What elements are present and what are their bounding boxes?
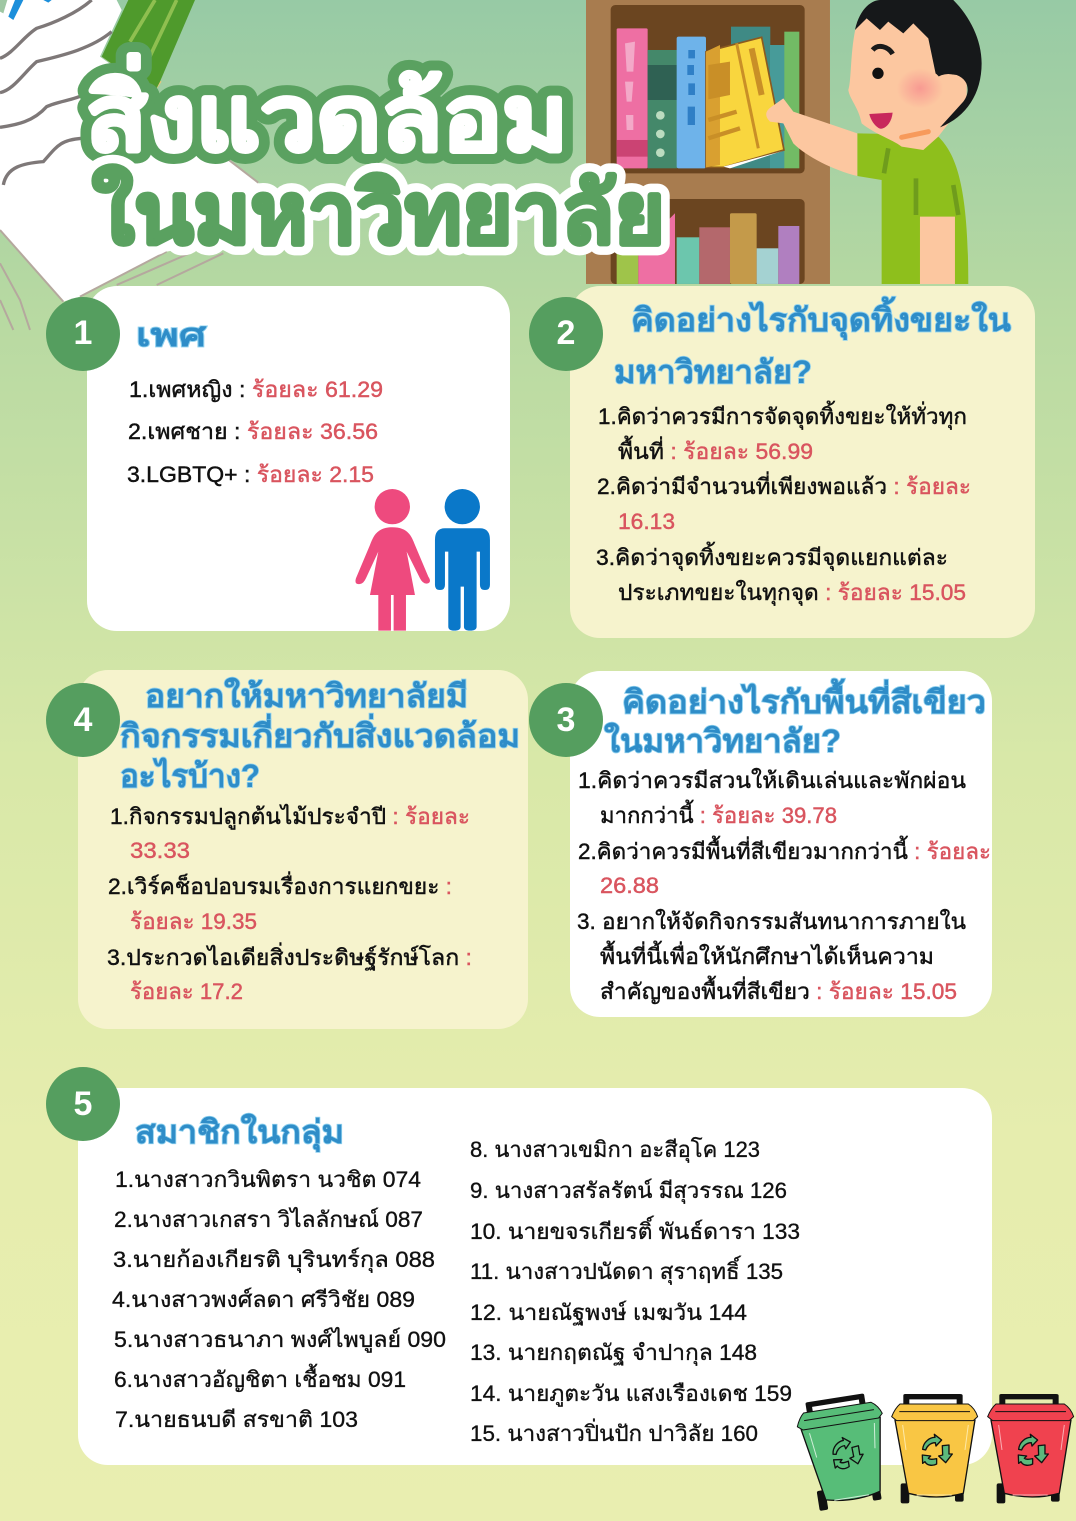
title: ในมหาวิทยาลัย [92,165,665,262]
list: members column 2: 15. นางสาวปิ่นปัก ปาวิลัย 160 [470,1418,758,1446]
heading: green space [604,678,986,759]
heading: activities [120,677,520,794]
badge 4: 4 [74,701,93,739]
list: members column 2: 10. นายขจรเกียรติ์ พันธ์ดารา 133 [470,1216,800,1244]
panel 3: green space [570,671,992,1017]
icon: woman and man [355,489,490,631]
title: ในมหาวิทยาลัย [92,165,665,262]
heading: green space: คิดอย่างไรกับพื้นที่สีเขียว [622,678,986,720]
boy [766,0,982,284]
heading: waste points: คิดอย่างไรกับจุดทิ้งขยะใน [631,296,1011,341]
heading: waste points: มหาวิทยาลัย? [614,354,812,390]
icon: recycling bins [794,1391,1074,1512]
list: green space results: 26.88 [600,873,659,898]
list: members column 1: 6.นางสาวอัญชิตา เชื้อชม 091 [114,1364,406,1392]
heading: green space: ในมหาวิทยาลัย? [604,722,841,759]
list: members column 2: 11. นางสาวปนัดดา สุราฤทธิ์ 135 [470,1256,783,1285]
list: activity results: 1.กิจกรรมปลูกต้นไม้ประจำปี : ร้อยละ [110,804,470,830]
list: gender results: 2.เพศชาย : ร้อยละ 36.56 [128,419,378,444]
badge 3 [529,683,603,757]
badge 1 [46,297,120,371]
list: members column 1: 5.นางสาวธนาภา พงศ์ไพบูลย์ 090 [114,1327,446,1353]
list: activity results: 2.เวิร์คช็อปอบรมเรื่องการแยกขยะ : [108,871,452,899]
list: members column 1: 2.นางสาวเกสรา วิไลลักษณ์ 087 [114,1207,423,1232]
heading: activities: อยากให้มหาวิทยาลัยมี [145,677,468,714]
list: activity results: 33.33 [130,838,190,863]
list: members column 2: 8. นางสาวเขมิกา อะสีอุโค 123 [470,1137,760,1163]
list: waste point results: พื้นที่ : ร้อยละ 56.99 [618,436,813,464]
heading: waste points [614,296,1011,390]
badge 2 [529,297,603,371]
heading: activities: อะไรบ้าง? [120,757,260,794]
list: gender results [127,377,383,487]
list: members column 1: 7.นายธนบดี สรขาติ 103 [115,1407,358,1432]
badge 5 [46,1067,120,1141]
list: members column 1: 4.นางสาวพงศ์ลดา ศรีวิชัย 089 [112,1287,415,1312]
title: สิ่งแวดล้อม [86,53,568,170]
list: gender results: 1.เพศหญิง : ร้อยละ 61.29 [129,377,383,402]
list: green space results: 1.คิดว่าควรมีสวนให้เดินเล่นและพักผ่อน [578,768,966,793]
icon: green bin [794,1391,896,1512]
list: waste point results: ประเภทขยะในทุกจุด : ร้อยละ 15.05 [618,580,966,606]
badge 1: 1 [74,314,92,352]
list: green space results: สำคัญของพื้นที่สีเขียว : ร้อยละ 15.05 [600,976,957,1004]
title: สิ่งแวดล้อม [86,53,568,170]
list: members column 1: 1.นางสาวกวินพิตรา นวชิต 074 [115,1167,421,1192]
list: activity results: ร้อยละ 19.35 [130,909,257,934]
list: green space results: มากกว่านี้ : ร้อยละ 39.78 [600,800,837,828]
badge 4 [46,683,120,757]
title [86,53,665,262]
list: waste point results: 2.คิดว่ามีจำนวนที่เพียงพอแล้ว : ร้อยละ [597,471,971,499]
badge 2: 2 [557,314,575,352]
list: members column 1 [112,1167,446,1432]
list: waste point results: 3.คิดว่าจุดทิ้งขยะควรมีจุดแยกแต่ละ [596,542,948,571]
list: green space results [577,768,991,1004]
list: members column 1: 3.นายก้องเกียรติ บุรินทร์กุล 088 [113,1247,435,1273]
bookshelf [586,0,830,284]
icon: yellow bin [892,1394,978,1503]
panel 4: activities [78,670,528,1029]
heading: members: สมาชิกในกลุ่ม [135,1113,344,1153]
list: members column 2: 9. นางสาวสรัลรัตน์ มีสุวรรณ 126 [470,1178,787,1204]
panel 1: gender [87,286,510,631]
list: activity results: 3.ประกวดไอเดียสิ่งประดิษฐ์รักษ์โลก : [107,942,472,971]
heading: activities: กิจกรรมเกี่ยวกับสิ่งแวดล้อม [120,713,520,754]
list: gender results: 3.LGBTQ+ : ร้อยละ 2.15 [127,462,374,487]
list: waste point results: 16.13 [618,509,675,534]
panel 5: members [78,1088,992,1465]
list: green space results: 3. อยากให้จัดกิจกรรมสันทนาการภายใน [577,909,966,934]
panel 2: waste points [570,286,1035,638]
badge 5: 5 [74,1085,92,1123]
list: green space results: พื้นที่นี้เพื่อให้นักศึกษาได้เห็นความ [600,941,934,969]
list: members column 2: 14. นายภูตะวัน แสงเรืองเดช 159 [470,1381,792,1407]
illustration: bookshelf and boy [586,0,982,284]
list: members column 2: 13. นายกฤตณัฐ จำปากุล 148 [470,1340,757,1366]
list: green space results: 2.คิดว่าควรมีพื้นที่สีเขียวมากกว่านี้ : ร้อยละ [578,836,991,864]
list: waste point results: 1.คิดว่าควรมีการจัดจุดทิ้งขยะให้ทั่วทุก [598,401,967,430]
badge 3: 3 [557,701,575,739]
icon: red bin [988,1394,1074,1503]
heading: gender: เพศ [136,317,207,353]
illustration: paper and pencil [0,0,267,330]
list: activity results: ร้อยละ 17.2 [130,979,243,1004]
list: members column 2 [470,1137,800,1446]
list: members column 2: 12. นายณัฐพงษ์ เมฆวัน 144 [470,1300,747,1326]
list: waste point results [596,401,971,606]
list: activity results [107,804,472,1004]
